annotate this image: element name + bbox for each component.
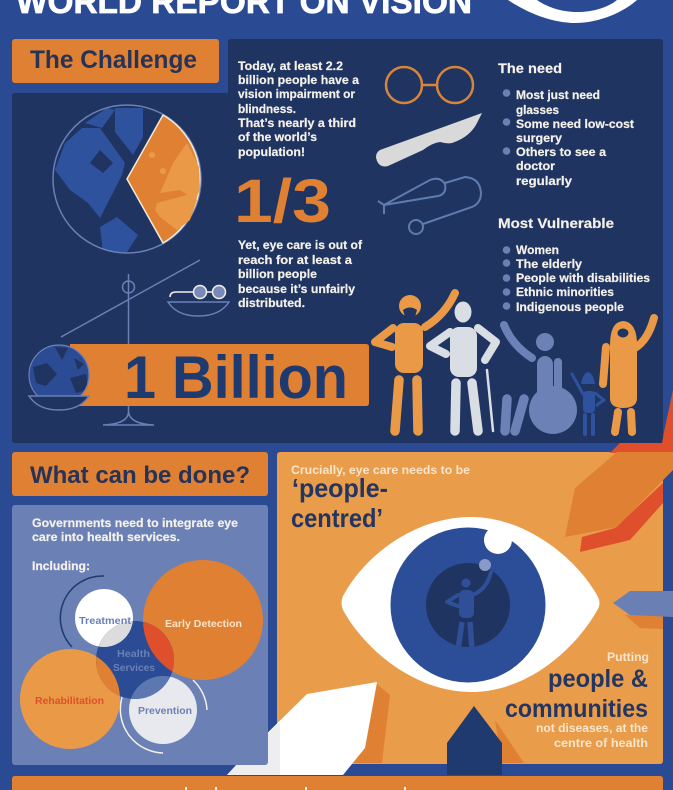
bar: 1 Billion: 1 Billion [124,344,348,411]
heading: What can be done: What can be done? [30,462,250,489]
text: people-centred heading: centred’ [291,503,383,533]
text: people-centred heading: ‘people- [292,473,388,503]
panel: governments [12,505,268,765]
icon: glasses on scale pan [170,286,226,298]
chart: balance scale [61,260,229,425]
icon: glasses [386,67,473,103]
text: impairment statistic: of the world’s [238,130,317,144]
list: most vulnerable: Indigenous people [516,300,624,314]
figure: elderly person with cane [430,302,496,431]
icon: large eye [342,517,600,692]
icon: scalpel [376,113,482,166]
figure: woman in veil [603,318,654,432]
big number: 1/3: 1/3 [234,167,331,235]
panel: challenge dark background [12,39,663,443]
chart: health services venn diagram [20,560,263,753]
list: the need: doctor [516,159,555,173]
list: most vulnerable: Most Vulnerable [498,215,614,231]
text: governments intro: Including: [32,559,90,573]
text: eye care out of reach: distributed. [238,296,305,310]
heading: What can be done [12,452,268,496]
arrow: navy house pointer [447,706,524,775]
list: most vulnerable: The elderly [516,257,582,271]
list: the need [498,60,634,188]
icon: eye logo [508,0,637,23]
heading: The Challenge [12,39,219,83]
list: the need: surgery [516,131,562,145]
list: the need: Some need low-cost [516,117,634,131]
list: most vulnerable: Ethnic minorities [516,285,614,299]
list: the need: Most just need [516,88,600,102]
list: the need: regularly [516,174,572,188]
text: people and communities: not diseases, at the [536,721,648,735]
arrow: white shard [227,682,390,775]
figure: person in wheelchair [504,325,577,434]
text: people-centred heading [291,463,470,533]
text: people and communities: Putting [607,650,649,664]
arrow: blue pointer [613,591,673,629]
list: most vulnerable: Women [516,243,559,257]
arrow: orange shard [565,452,673,537]
icon: stethoscope [378,177,481,234]
text: impairment statistic: Today, at least 2.2 [238,59,343,73]
figure: child [572,372,604,434]
list: most vulnerable [498,215,650,314]
text: people-centred heading: Crucially, eye care needs to be [291,463,470,477]
text: governments intro [32,516,238,573]
figure: man with turban [375,293,455,431]
chart: health services venn diagram: Early Detection [165,618,242,630]
chart: health services venn diagram: Services [113,662,155,674]
text: impairment statistic: blindness. [238,102,296,116]
text: people and communities: communities [505,695,648,723]
figure: person in pupil [447,572,491,650]
icon: globe on scale pan [29,345,89,410]
chart: health services venn diagram: Health [117,648,150,660]
text: governments intro: Governments need to integrate eye [32,516,238,530]
text: impairment statistic: population! [238,145,305,159]
text: governments intro: care into health services. [32,530,180,544]
heading: The Challenge: The Challenge [30,46,197,74]
chart: health services venn diagram: Rehabilitation [35,695,104,707]
text: people and communities [505,650,649,750]
list: the need: The need [498,60,562,76]
list: most vulnerable: People with disabilities [516,271,650,285]
text: impairment statistic: That’s nearly a third [238,116,356,130]
text: people and communities: people & [548,665,648,693]
text: impairment statistic: billion people have a [238,73,359,87]
chart: health services venn diagram: Treatment [79,615,132,627]
arrow: red shard [580,390,673,552]
text: people and communities: centre of health [554,736,648,750]
chart: health services venn diagram: Prevention [138,705,192,717]
text: impairment statistic: vision impairment or [238,87,355,101]
icon: globe with one third highlighted [53,105,201,253]
text: eye care out of reach: reach for at least a [238,253,352,267]
panel: bottom banner [12,776,663,790]
text: impairment statistic [238,59,359,159]
panel: people-centred [277,452,663,764]
text: eye care out of reach: because it’s unfairly [238,282,355,296]
list: the need: Others to see a [516,145,606,159]
text: eye care out of reach: billion people [238,267,317,281]
text: eye care out of reach: Yet, eye care is out of [238,238,363,252]
list: the need: glasses [516,103,559,117]
text: eye care out of reach [238,238,363,310]
